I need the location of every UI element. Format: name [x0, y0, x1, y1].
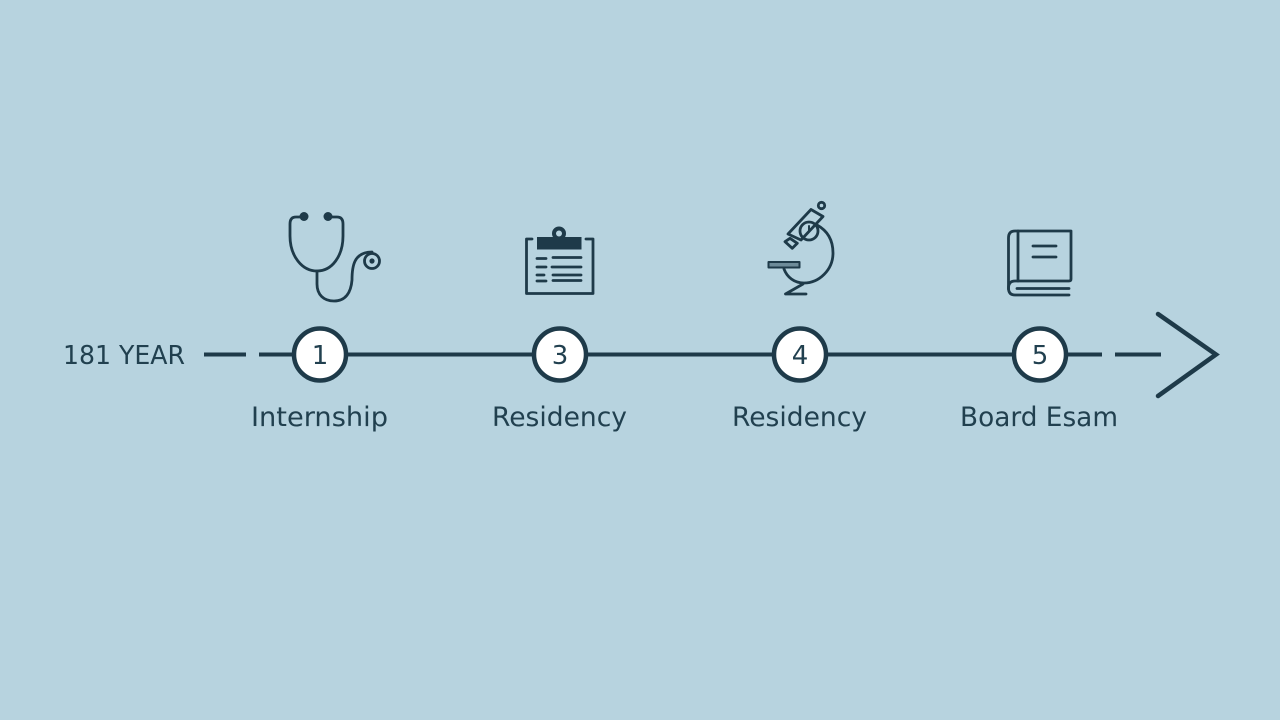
- label: internship: Internship: [251, 402, 388, 433]
- step 5 marker: 5: [1032, 341, 1048, 371]
- label: residency 4: Residency: [732, 402, 867, 433]
- step 3 marker: [534, 328, 586, 380]
- step 4 marker: [774, 328, 826, 380]
- icon: stethoscope: [290, 212, 380, 301]
- label: board exam: Board Esam: [960, 402, 1118, 433]
- icon: clipboard: [526, 228, 593, 294]
- label: 181 year: 181 YEAR: [63, 341, 185, 371]
- step 3 marker: 3: [552, 341, 568, 371]
- label: residency 3: Residency: [492, 402, 627, 433]
- step 4 marker: 4: [792, 341, 808, 371]
- step 5 marker: [1014, 328, 1066, 380]
- arrowhead: [1158, 314, 1216, 396]
- icon: book: [1008, 231, 1071, 295]
- step 1 marker: 1: [312, 341, 328, 371]
- icon: microscope: [768, 202, 833, 294]
- timeline line: [204, 352, 1161, 356]
- step 1 marker: [294, 328, 346, 380]
